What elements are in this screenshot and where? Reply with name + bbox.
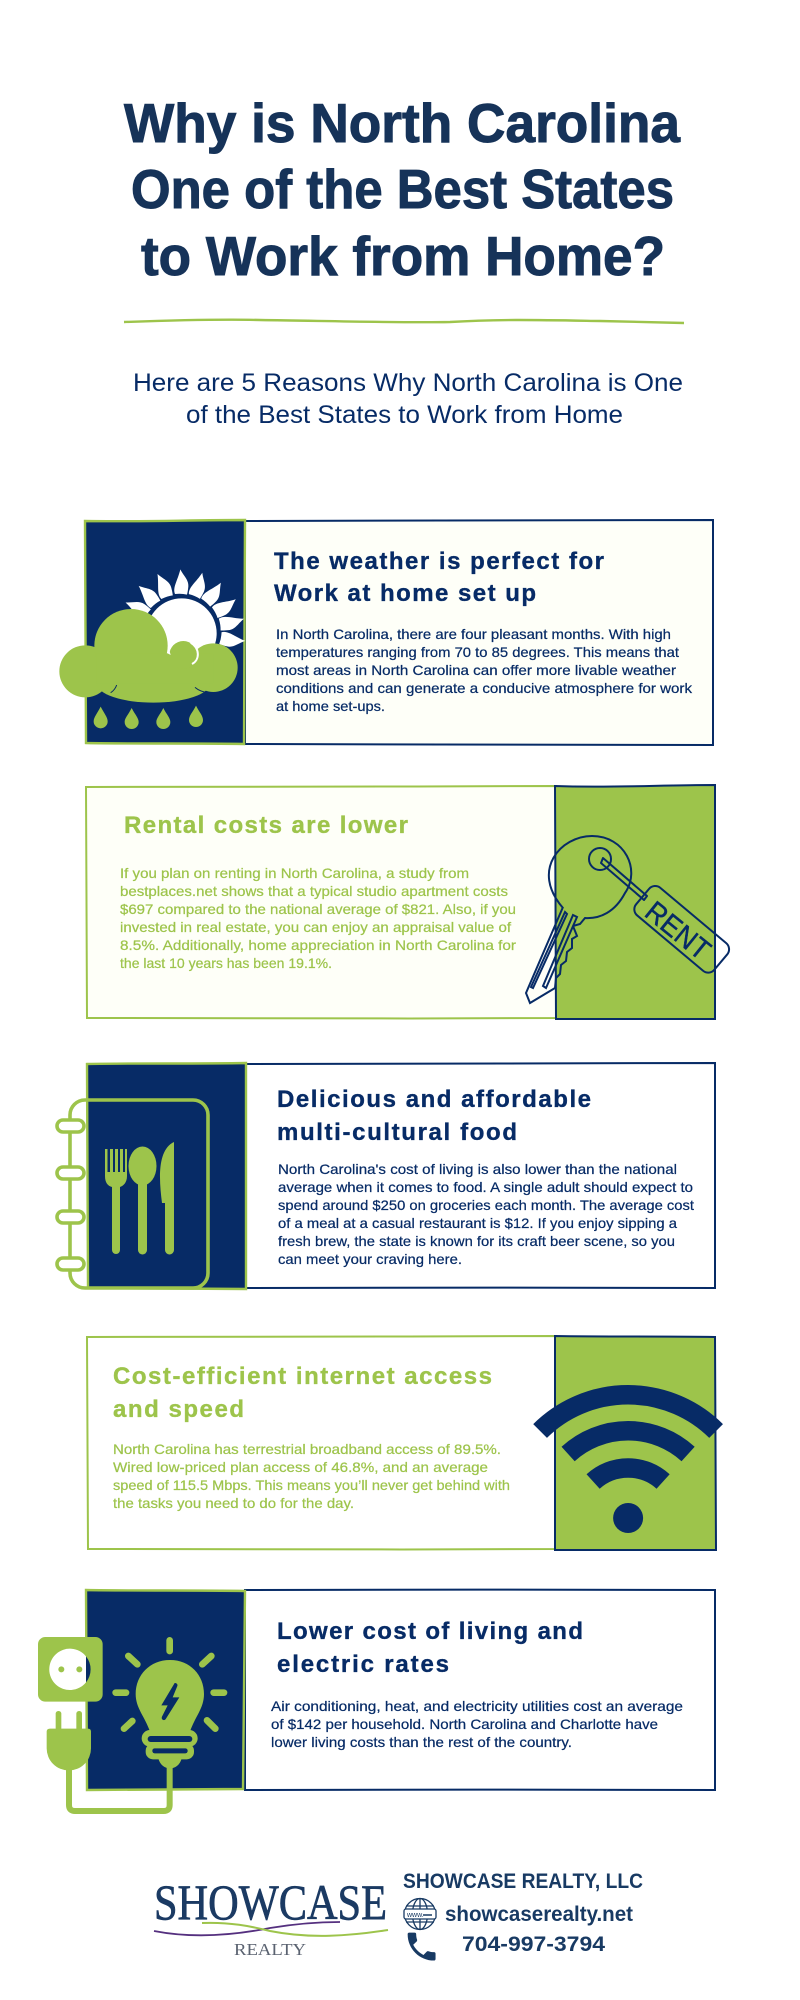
panel: food [57, 1063, 715, 1289]
title: One of the Best States [131, 158, 674, 220]
heading: food [277, 1086, 591, 1146]
icon panel: electric [86, 1590, 245, 1790]
body: rental: invested in real estate, you can enjoy an appraisal value of [120, 919, 511, 935]
icon: socket, plug and light bulb [38, 1637, 224, 1811]
body: food: spend around $250 on groceries each month. The average cost [278, 1197, 694, 1213]
icon: rent key and tag [526, 836, 732, 1003]
contact block: showcaserealty.net [445, 1903, 633, 1926]
icon: globe: www. [406, 1912, 424, 1919]
panel: electric [38, 1590, 715, 1811]
heading: internet [113, 1363, 492, 1423]
heading: food: Delicious and affordable [277, 1086, 591, 1113]
body: weather [276, 626, 693, 714]
body: weather: temperatures ranging from 70 to 85 degrees. This means that [276, 644, 679, 660]
icon panel: weather [85, 520, 245, 744]
heading: weather: Work at home set up [274, 580, 536, 607]
title [124, 92, 680, 287]
title: to Work from Home? [141, 225, 665, 287]
heading: weather [274, 548, 604, 607]
icon: wifi [540, 1395, 716, 1533]
logo: Showcase Realty: SHOWCASE [154, 1874, 387, 1930]
icon: phone [408, 1933, 436, 1961]
logo: Showcase Realty [154, 1874, 388, 1959]
icon: menu with cutlery [57, 1100, 208, 1288]
heading: food: multi-cultural food [277, 1119, 517, 1146]
body: weather: most areas in North Carolina can offer more livable weather [276, 662, 676, 678]
logo: Showcase Realty: REALTY [234, 1940, 306, 1959]
body: rental: the last 10 years has been 19.1%. [120, 955, 332, 971]
heading: rental: Rental costs are lower [124, 812, 408, 839]
body: electric: of $142 per household. North Carolina and Charlotte have [271, 1716, 658, 1732]
contact block: SHOWCASE REALTY, LLC [403, 1870, 643, 1893]
body: rental: $697 compared to the national average of $821. Also, if you [120, 901, 516, 917]
panel: weather [59, 520, 713, 745]
body: electric [271, 1698, 683, 1750]
contact block [403, 1870, 643, 1961]
body: food: average when it comes to food. A single adult should expect to [278, 1179, 693, 1195]
panel: rental [86, 785, 732, 1019]
body: internet [113, 1441, 510, 1511]
heading: electric [277, 1618, 583, 1678]
heading: electric: electric rates [277, 1651, 449, 1678]
panel: internet [87, 1336, 716, 1550]
body: food: of a meal at a casual restaurant is $12. If you enjoy sipping a [278, 1215, 677, 1231]
body: internet: speed of 115.5 Mbps. This means you’ll never get behind with [113, 1477, 510, 1493]
body: rental [120, 865, 516, 971]
icon: sun and rain cloud [59, 569, 246, 729]
body: internet: North Carolina has terrestrial broadband access of 89.5%. [113, 1441, 501, 1457]
label: RENT: RENT [639, 896, 716, 967]
icon panel: rental [555, 785, 715, 1019]
body: electric: lower living costs than the rest of the country. [271, 1734, 572, 1750]
title: Why is North Carolina [124, 92, 680, 154]
body: weather: at home set-ups. [276, 698, 385, 714]
icon panel: food [87, 1063, 246, 1289]
body: weather: In North Carolina, there are four pleasant months. With high [276, 626, 671, 642]
icon: globe [404, 1898, 436, 1930]
body: food: North Carolina's cost of living is also lower than the national [278, 1161, 677, 1177]
body: food [278, 1161, 694, 1267]
heading: internet: and speed [113, 1396, 244, 1423]
heading: electric: Lower cost of living and [277, 1618, 583, 1645]
subtitle: Here are 5 Reasons Why North Carolina is One [133, 369, 683, 397]
body: food: fresh brew, the state is known for its craft beer scene, so you [278, 1233, 675, 1249]
body: internet: the tasks you need to do for the day. [113, 1495, 354, 1511]
body: weather: conditions and can generate a conducive atmosphere for work [276, 680, 693, 696]
body: food: can meet your craving here. [278, 1251, 462, 1267]
body: electric: Air conditioning, heat, and electricity utilities cost an average [271, 1698, 683, 1714]
body: rental: bestplaces.net shows that a typical studio apartment costs [120, 883, 508, 899]
body: rental: If you plan on renting in North Carolina, a study from [120, 865, 469, 881]
subtitle: of the Best States to Work from Home [186, 401, 623, 429]
heading: internet: Cost-efficient internet access [113, 1363, 492, 1390]
body: rental: 8.5%. Additionally, home appreciation in North Carolina for [120, 937, 516, 953]
contact block: 704-997-3794 [462, 1933, 605, 1956]
heading: weather: The weather is perfect for [274, 548, 604, 575]
icon panel: internet [555, 1336, 716, 1550]
subtitle [133, 369, 683, 429]
body: internet: Wired low-priced plan access of 46.8%, and an average [113, 1459, 488, 1475]
